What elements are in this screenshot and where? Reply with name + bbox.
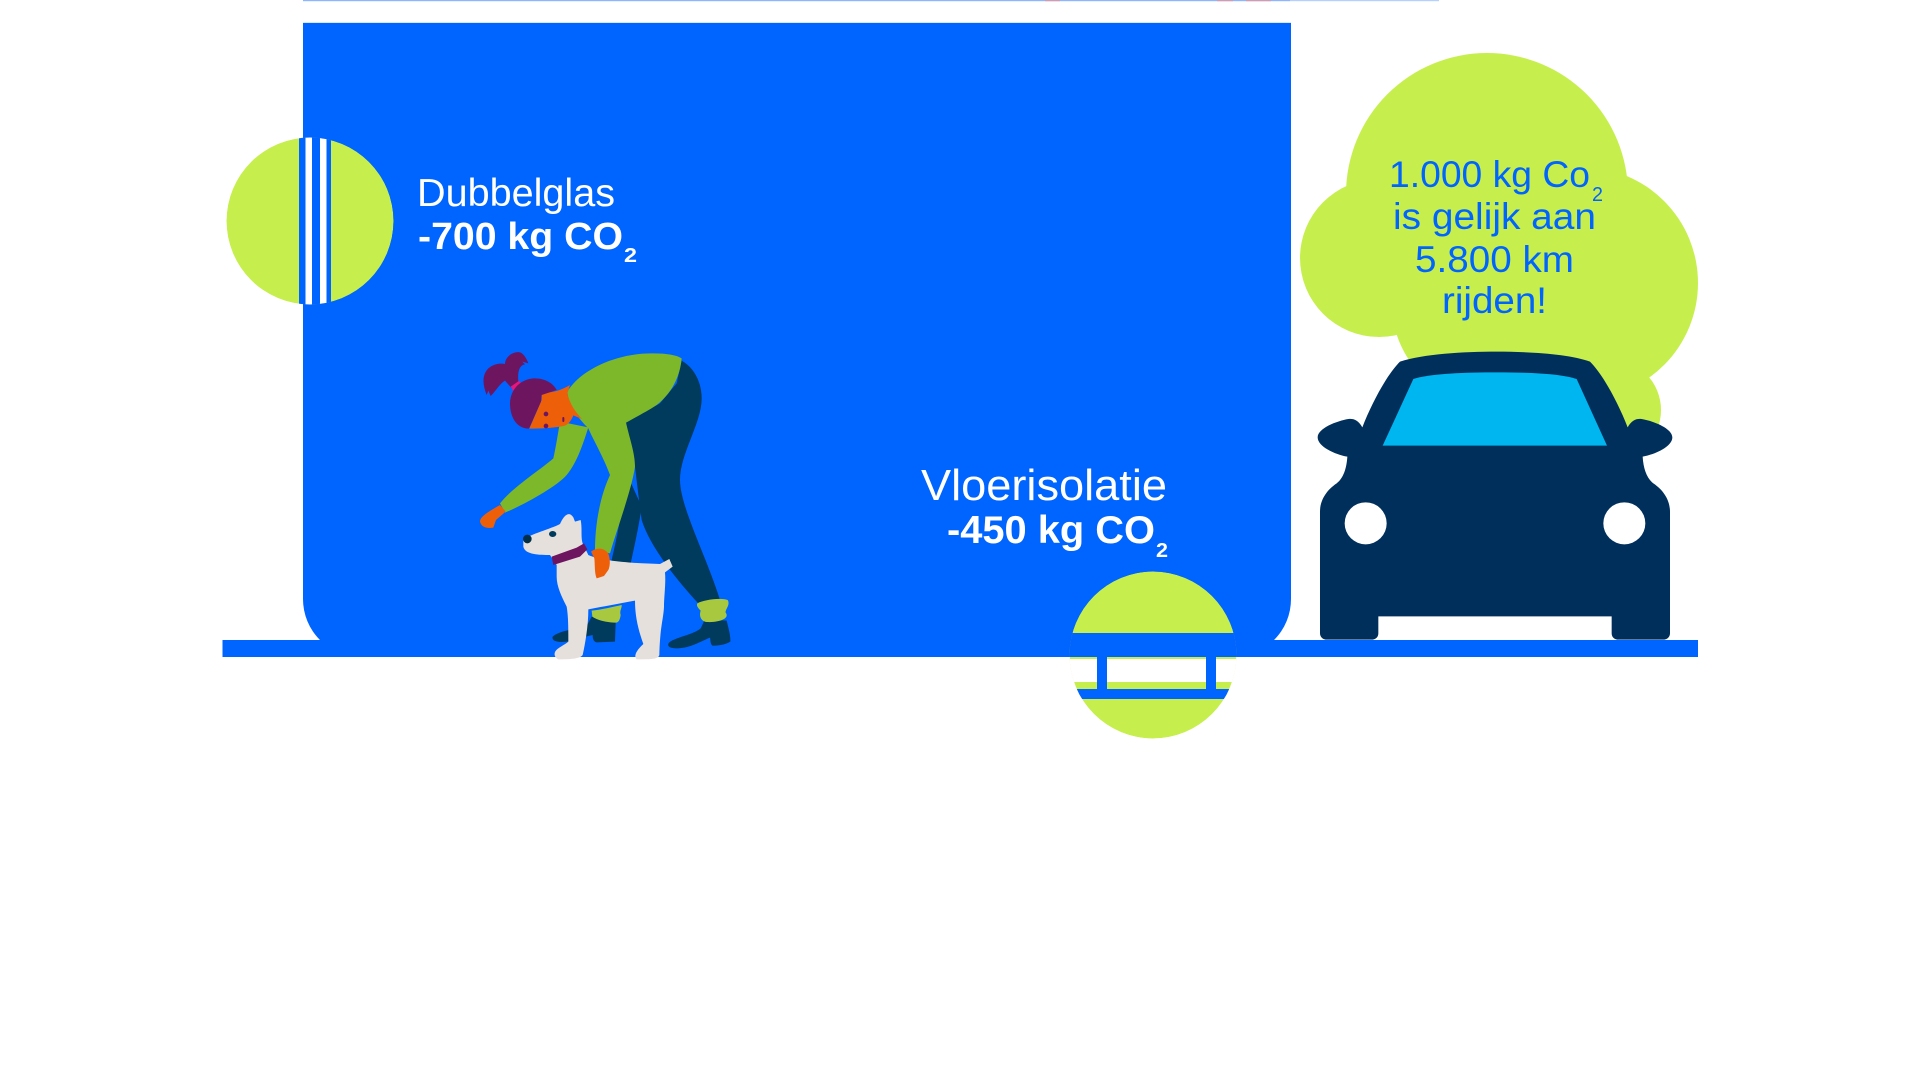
hair bbox=[510, 378, 557, 429]
icon: floor insulation circle bbox=[1070, 572, 1236, 738]
text: cloud message: 1.000 kg Co bbox=[1389, 154, 1590, 195]
text: Dubbelglas saving bbox=[417, 172, 637, 267]
car body bbox=[1318, 352, 1672, 640]
far leg bbox=[610, 473, 642, 567]
dog eye bbox=[549, 531, 556, 537]
right cuff bbox=[697, 599, 729, 622]
text: Dubbelglas saving: -700 kg CO bbox=[418, 216, 623, 258]
hair band bbox=[511, 381, 522, 391]
dog bbox=[523, 514, 673, 659]
right boot bbox=[668, 619, 730, 648]
text: Vloerisolatie saving bbox=[921, 461, 1168, 562]
ponytail bbox=[483, 352, 528, 396]
text: cloud message: is gelijk aan bbox=[1393, 196, 1596, 237]
icon: double glazing circle bbox=[226, 130, 394, 312]
illustration: woman petting dog bbox=[480, 352, 730, 659]
text: cloud message bbox=[1389, 154, 1603, 321]
left headlight bbox=[1345, 502, 1387, 544]
dog nose bbox=[523, 535, 532, 543]
text: Dubbelglas saving: 2 bbox=[624, 245, 637, 267]
icon: car front bbox=[1318, 352, 1672, 640]
dog collar bbox=[552, 543, 587, 565]
panel: blue house wall bbox=[303, 23, 1291, 657]
text: Vloerisolatie saving: -450 kg CO bbox=[947, 509, 1155, 552]
face and neck bbox=[529, 385, 582, 429]
hand on dog bbox=[591, 549, 610, 578]
left boot bbox=[552, 617, 616, 642]
left cuff bbox=[592, 605, 622, 623]
text: cloud message: 5.800 km bbox=[1415, 239, 1574, 280]
reaching hand bbox=[480, 505, 506, 528]
text: Vloerisolatie saving: Vloerisolatie bbox=[921, 461, 1167, 510]
exhaust cloud bbox=[1300, 53, 1698, 461]
reaching arm bbox=[500, 422, 588, 513]
windscreen bbox=[1383, 372, 1607, 446]
text: Dubbelglas saving: Dubbelglas bbox=[417, 172, 615, 215]
text: cloud message: rijden! bbox=[1442, 280, 1547, 321]
torso and arm bbox=[567, 353, 682, 553]
near leg and hips bbox=[626, 361, 720, 603]
text: cloud message: 2 bbox=[1592, 184, 1603, 206]
right headlight bbox=[1603, 502, 1645, 544]
text: Vloerisolatie saving: 2 bbox=[1156, 540, 1168, 562]
floor bar bbox=[222, 640, 1698, 657]
